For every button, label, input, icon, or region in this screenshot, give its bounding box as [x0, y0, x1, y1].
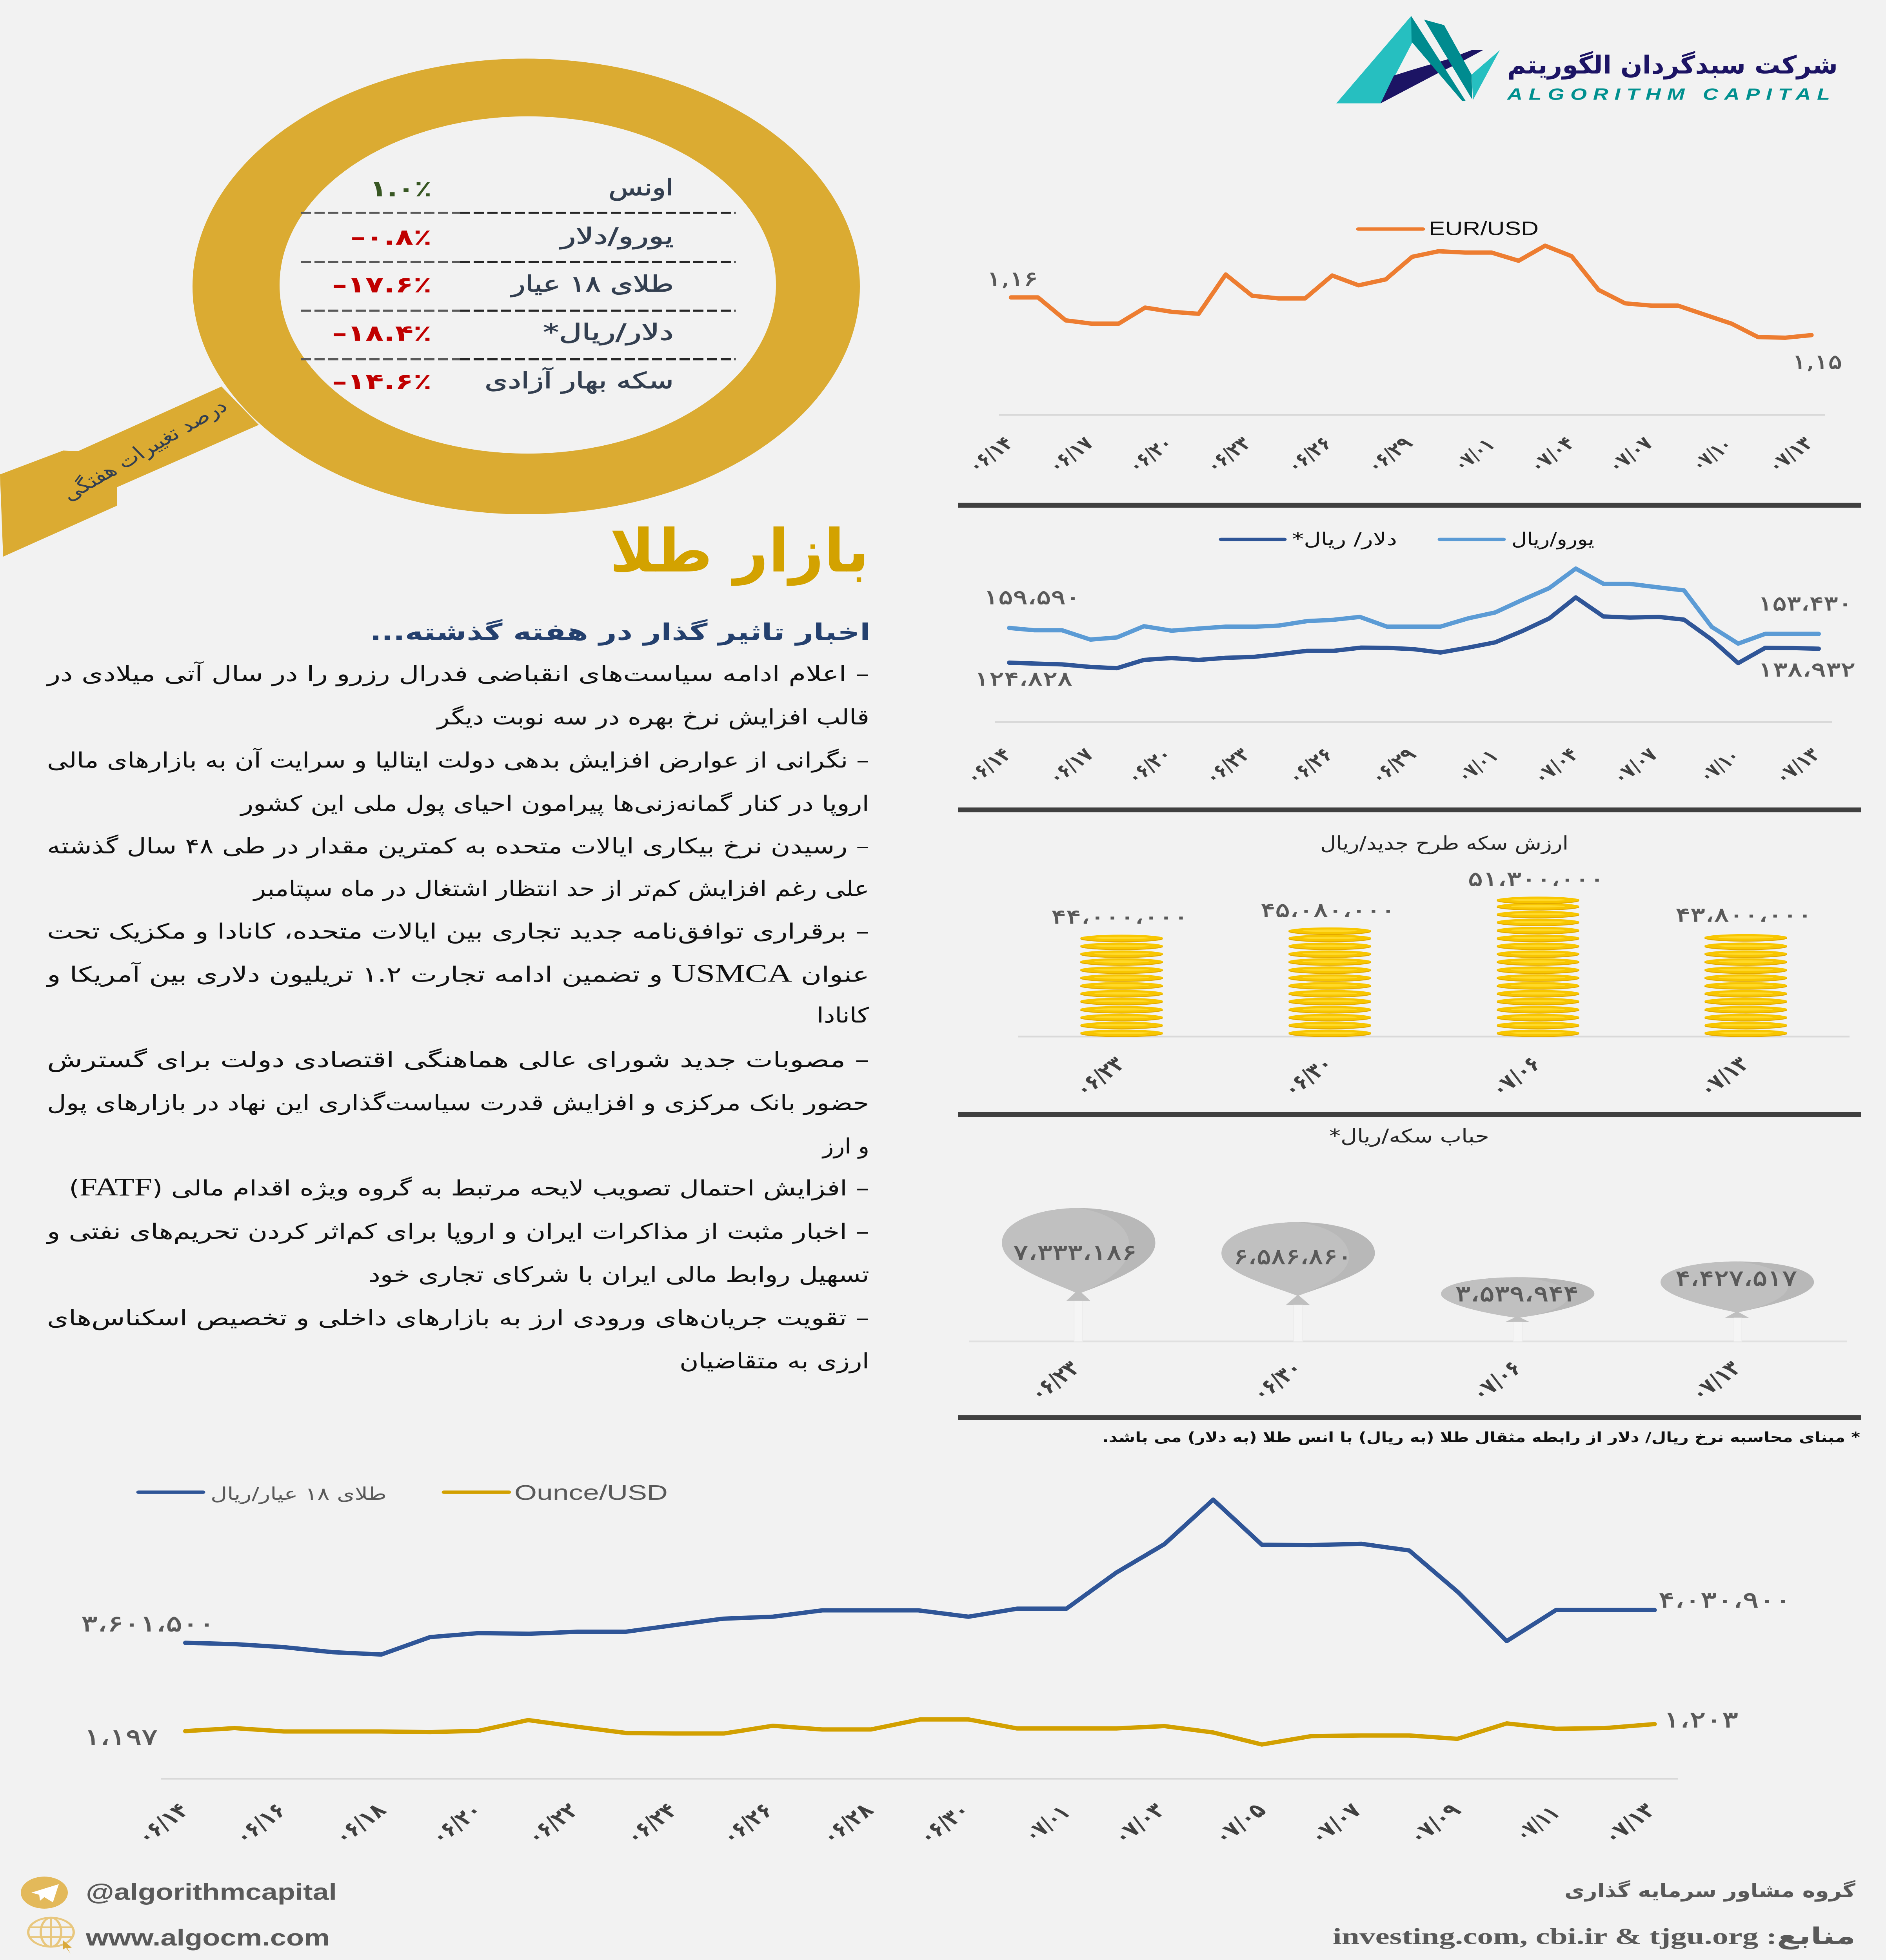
date axis: ۰۶/۳۰ [1245, 1356, 1308, 1405]
date axis: ۰۶/۲۹ [1361, 433, 1418, 477]
date axis: ۰۶/۲۳ [1200, 433, 1257, 477]
date axis: ۰۷/۰۷ [1606, 744, 1663, 788]
row: 18k gold [332, 271, 674, 298]
news text block: حضور بانک مرکزی و افزایش قدرت سیاست‌گذاری این نهاد در بازارهای پول [47, 1091, 869, 1116]
value labels: ۴۵،۰۸۰،۰۰۰ [1261, 898, 1395, 922]
date axis: ۰۷/۰۴ [1523, 433, 1580, 477]
news text block: تسهیل روابط مالی ایران با شرکای تجاری خود [369, 1262, 869, 1287]
news text block: – اخبار مثبت از مذاکرات ایران و اروپا برای کم‌اثر کردن تحریم‌های نفتی و [46, 1219, 869, 1244]
date axis: ۰۶/۲۶ [1282, 744, 1339, 788]
logo: Algorithm Capital: ALGORITHM CAPITAL [1507, 85, 1830, 103]
coin stack 06/30 [1288, 927, 1371, 1037]
date axis: ۰۶/۲۸ [815, 1798, 879, 1848]
18k gold line [185, 1500, 1655, 1655]
date axis: ۰۶/۱۸ [327, 1798, 392, 1848]
row: 18k gold: –۱۷.۶٪ [332, 272, 432, 298]
news text block [46, 661, 869, 1374]
dollar/rial line [1009, 597, 1819, 668]
title: بازار طلا [610, 517, 869, 586]
news text block: قالب افزایش نرخ بهره در سه نوبت دیگر [436, 705, 869, 730]
legend: طلای ۱۸ عیار/ریال [211, 1484, 387, 1504]
value labels: ۴،۰۳۰،۹۰۰ [1659, 1587, 1791, 1613]
value labels: ۱۳۸،۹۳۲ [1758, 658, 1855, 681]
date axis: ۰۷/۰۶ [1465, 1356, 1528, 1405]
row: ounce [370, 174, 674, 202]
date axis: ۰۷/۱۳ [1762, 433, 1819, 477]
magnifier ring [193, 59, 860, 514]
date axis: ۰۶/۲۳ [1023, 1356, 1086, 1405]
date axis: ۰۶/۳۰ [912, 1798, 976, 1848]
value labels: ۱،۲۰۳ [1664, 1707, 1738, 1733]
ounce line [185, 1719, 1655, 1744]
date axis: ۰۷/۰۴ [1527, 744, 1584, 788]
value labels: ۴۴،۰۰۰،۰۰۰ [1051, 905, 1188, 928]
date axis [1023, 1356, 1747, 1405]
row: Bahar Azadi coin: سکه بهار آزادی [485, 367, 674, 394]
date axis: ۰۶/۲۴ [619, 1798, 683, 1848]
date axis: ۰۶/۱۴ [960, 744, 1017, 788]
news text block: – اعلام ادامه سیاست‌های انقباضی فدرال رزرو را در سال آتی میلادی در [46, 661, 869, 686]
date axis: ۰۶/۲۳ [1068, 1052, 1131, 1101]
balloon chart: coin bubble [969, 1126, 1847, 1405]
news text block: اروپا در کنار گمانه‌زنی‌ها پیرامون احیای پول ملی این کشور [240, 791, 869, 816]
news text block: – نگرانی از عوارض افزایش بدهی دولت ایتالیا و سرایت آن به بازارهای مالی [47, 748, 869, 773]
news text block: ارزی به متقاضیان [680, 1349, 869, 1374]
coin stack 07/06 [1497, 897, 1579, 1037]
subheading: اخبار تاثیر گذار در هفته گذشته... [370, 619, 870, 646]
news text block: – تقویت جریان‌های ورودی ارز به بازارهای داخلی و تخصیص اسکناس‌های [47, 1305, 869, 1330]
date axis: ۰۶/۱۷ [1042, 744, 1099, 788]
row: 18k gold: طلای ۱۸ عیار [510, 271, 674, 297]
value labels: ۱,۱۶ [987, 267, 1038, 290]
row: ounce: اونس [609, 174, 674, 201]
value labels: ۵۱،۳۰۰،۰۰۰ [1468, 867, 1604, 891]
chart title: ارزش سکه طرح جدید/ریال [1320, 833, 1568, 855]
icon: globe [28, 1918, 74, 1954]
date axis: ۰۷/۰۷ [1602, 433, 1659, 477]
value labels: ۳،۵۳۹،۹۴۴ [1455, 1281, 1579, 1307]
legend: Ounce/USD [514, 1481, 668, 1504]
date axis: ۰۷/۰۷ [1303, 1798, 1367, 1848]
date axis: ۰۷/۱۳ [1769, 744, 1826, 788]
row: dollar/rial: –۱۸.۴٪ [332, 320, 432, 346]
news text block: – رسیدن نرخ بیکاری ایالات متحده به کمترین مقدار در طی ۴۸ سال گذشته [47, 834, 869, 858]
value labels: ۴،۴۲۷،۵۱۷ [1675, 1265, 1797, 1291]
euro/rial line [1009, 568, 1819, 644]
date axis [960, 744, 1826, 788]
date axis: ۰۶/۱۶ [228, 1798, 292, 1848]
value labels: ۷،۳۳۳،۱۸۶ [1013, 1240, 1137, 1265]
date axis: ۰۶/۱۴ [962, 433, 1019, 477]
line chart: dollar/rial and euro/rial [960, 529, 1855, 788]
value labels: ۱۵۹،۵۹۰ [984, 586, 1080, 609]
value labels [987, 267, 1842, 374]
footer: sources: منابع: investing.com, cbi.ir & tjgu.org [1333, 1924, 1855, 1950]
date axis: ۰۷/۰۵ [1207, 1798, 1272, 1848]
date axis: ۰۷/۱۳ [1684, 1356, 1747, 1405]
telegram handle: @algorithmcapital [86, 1880, 337, 1905]
footer: contact links [21, 1877, 337, 1954]
news text block: عنوان USMCA و تضمین ادامه تجارت ۱.۲ تریلیون دلاری بین آمریکا و [46, 960, 869, 987]
value labels [974, 586, 1855, 690]
value labels: ۱۵۳،۴۳۰ [1758, 592, 1852, 615]
value labels [81, 1587, 1791, 1750]
coin stack 06/23 [1080, 935, 1163, 1037]
date axis: ۰۶/۲۲ [520, 1798, 584, 1848]
date axis: ۰۶/۲۰ [424, 1798, 488, 1848]
date axis: ۰۷/۱۳ [1692, 1052, 1755, 1101]
legend: یورو/ریال [1512, 529, 1594, 550]
magnifier handle [0, 387, 259, 557]
row: Bahar Azadi coin: –۱۴.۶٪ [332, 368, 432, 395]
row: dollar/rial: دلار/ریال* [543, 319, 674, 345]
row: ounce: ۱.۰٪ [370, 176, 432, 202]
date axis: ۰۷/۰۱ [1017, 1801, 1076, 1846]
value labels: ۴۳،۸۰۰،۰۰۰ [1675, 903, 1812, 926]
news text block: – برقراری توافق‌نامه جدید تجاری بین ایالات متحده، کانادا و مکزیک تحت [47, 919, 869, 944]
magnifier: weekly change table [0, 59, 860, 557]
date axis: ۰۶/۲۹ [1365, 744, 1421, 788]
row: Bahar Azadi coin [332, 367, 674, 395]
date axis [130, 1798, 1661, 1848]
news text block: – مصوبات جدید شورای عالی هماهنگی اقتصادی دولت برای گسترش [47, 1047, 869, 1073]
date axis: ۰۷/۱۱ [1508, 1801, 1565, 1846]
value labels [1051, 867, 1812, 928]
date axis [962, 433, 1819, 477]
value labels: ۶،۵۸۶،۸۶۰ [1234, 1244, 1352, 1269]
coin stack chart: new-design coin price [1018, 833, 1850, 1101]
line chart: 18k gold and ounce [81, 1481, 1791, 1848]
date axis: ۰۷/۰۳ [1107, 1798, 1171, 1848]
date axis: ۰۶/۱۷ [1042, 433, 1099, 477]
line chart: EUR/USD [962, 218, 1842, 477]
news text block: – افزایش احتمال تصویب لایحه مرتبط به گروه ویژه اقدام مالی (FATF) [69, 1173, 869, 1201]
legend [1221, 529, 1594, 550]
date axis: ۰۶/۲۰ [1122, 433, 1179, 477]
website: www.algocm.com [85, 1925, 330, 1951]
date axis: ۰۶/۲۶ [715, 1798, 779, 1848]
value labels: ۳،۶۰۱،۵۰۰ [81, 1611, 215, 1637]
date axis: ۰۶/۱۴ [130, 1798, 194, 1848]
date axis: ۰۷/۰۱ [1447, 434, 1500, 475]
date axis: ۰۷/۱۰ [1693, 746, 1746, 786]
value labels: ۱۲۴،۸۲۸ [974, 667, 1072, 690]
icon: telegram [21, 1877, 68, 1909]
date axis: ۰۷/۰۱ [1451, 746, 1504, 786]
row: dollar/rial [332, 319, 674, 346]
legend: دلار/ ریال* [1292, 529, 1397, 550]
date axis: ۰۶/۳۰ [1276, 1052, 1339, 1101]
date axis: ۰۷/۰۶ [1484, 1052, 1547, 1101]
balloons [1002, 1208, 1814, 1341]
date axis: ۰۷/۱۳ [1597, 1798, 1661, 1848]
news text block: و ارز [821, 1134, 869, 1159]
row: EUR/USD: یورو/دلار [559, 223, 674, 249]
data line [1011, 246, 1812, 338]
coin stack 07/13 [1704, 934, 1787, 1037]
legend [138, 1481, 668, 1504]
row: EUR/USD [351, 223, 674, 250]
legend: EUR/USD [1429, 218, 1539, 240]
date axis: ۰۶/۲۳ [1199, 744, 1256, 788]
value labels: ۱،۱۹۷ [84, 1724, 158, 1750]
row: EUR/USD: –۰.۸٪ [351, 224, 432, 250]
footnote: * مبنای محاسبه نرخ ریال/ دلار از رابطه مثقال طلا (به ریال) با انس طلا (به دلار) می باشد. [1102, 1429, 1860, 1445]
news text block: کانادا [817, 1003, 869, 1028]
value labels [1013, 1240, 1797, 1307]
date axis: ۰۷/۰۹ [1402, 1798, 1466, 1848]
date axis: ۰۷/۱۰ [1685, 434, 1738, 475]
date axis: ۰۶/۲۶ [1281, 433, 1337, 477]
logo: Algorithm Capital [1336, 16, 1838, 103]
handle caption: درصد تغییرات هفتگی [56, 395, 233, 505]
news text block: علی رغم افزایش کم‌تر از حد انتظار اشتغال در ماه سپتامبر [253, 877, 869, 902]
footer: publisher: گروه مشاور سرمایه گذاری [1564, 1880, 1856, 1902]
value labels: ۱,۱۵ [1792, 350, 1842, 374]
chart title: حباب سکه/ریال* [1329, 1126, 1489, 1147]
date axis: ۰۶/۲۰ [1121, 744, 1177, 788]
date axis [1068, 1052, 1755, 1101]
